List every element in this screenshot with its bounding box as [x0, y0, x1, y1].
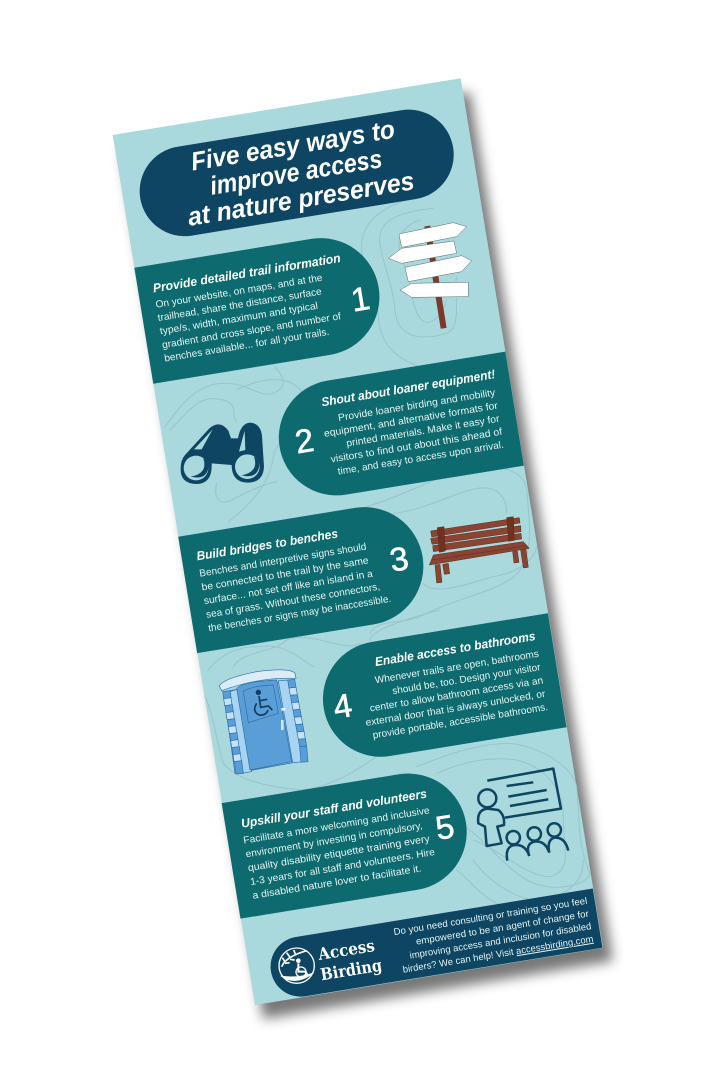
title pill: [133, 103, 460, 243]
panel 5 heading: Upskill your staff and volunteers: [240, 787, 428, 831]
panel 2 body: equipment, and alternative formats for: [323, 401, 499, 440]
panel 2 heading: Shout about loaner equipment!: [320, 367, 496, 409]
panel 2 body: printed materials. Make it easy for: [346, 414, 501, 450]
panel 4 body: center to allow bathroom access via an: [369, 675, 544, 715]
panel 4 heading: Enable access to bathrooms: [374, 629, 536, 669]
card drop shadow: [122, 92, 613, 1019]
rotated card: [113, 78, 603, 1005]
panel 3 body: the benches or signs may be inaccessible.: [208, 594, 392, 634]
panel 2 body: time, and easy to access upon arrival.: [337, 440, 505, 478]
icon: accessible portable toilet: [219, 670, 308, 774]
panel 2 body: visitors to find out about this ahead of: [330, 427, 503, 465]
number 3: 3: [387, 539, 411, 579]
logo wordmark: Birding: [319, 956, 384, 984]
title text: Five easy ways to: [189, 114, 397, 177]
footer call to action: [393, 896, 594, 976]
card background: [113, 78, 603, 1005]
panel 1 body: type/s, width, maximum and typical: [159, 301, 319, 337]
footer call to action: empowered to be an agent of change for: [415, 909, 590, 948]
panel 4 body: provide portable, accessible bathrooms.: [372, 702, 549, 741]
panel 3: bridges to benches: [178, 498, 432, 653]
panel 3 body: surface... not set off like an island in a: [203, 569, 374, 607]
icon: park bench: [429, 517, 529, 583]
footer band: [266, 889, 602, 1001]
panel 1: trail information: [134, 229, 388, 384]
panel 4 body: external door that is always unlocked, or: [365, 689, 547, 729]
title text: at nature preserves: [185, 165, 416, 232]
panel 3 body: sea of grass. Without these connectors,: [205, 582, 381, 621]
panel 1 body: On your website, on maps, and at the: [155, 273, 324, 311]
topographic contour lines: [165, 195, 590, 907]
logo emblem: [279, 948, 314, 983]
number 2: 2: [292, 421, 316, 460]
footer call to action: Do you need consulting or training so you feel: [393, 896, 588, 938]
panel 3 heading: Build bridges to benches: [195, 527, 339, 563]
icon: signpost: [388, 223, 472, 328]
number 5: 5: [433, 807, 457, 847]
rotated content group: [116, 100, 602, 1005]
panel 1 body: [155, 271, 344, 365]
panel 3 body: Benches and interpretive signs should: [199, 542, 367, 580]
footer call to action: birders? We can help! Visit accessbirding.com: [402, 934, 594, 976]
number 1: 1: [348, 279, 372, 319]
panel 4 body: Whenever trails are open, bathrooms: [374, 649, 540, 686]
panel 4: access to bathrooms: [314, 613, 567, 765]
logo wordmark: Access: [316, 936, 376, 964]
panel 1 body: gradient and cross slope, and number of: [161, 311, 342, 351]
panel 5 body: [243, 805, 440, 902]
panel 5 body: quality disability etiquette training every: [247, 834, 431, 874]
panel 5 body: Facilitate a more welcoming and inclusive: [243, 805, 431, 847]
panel 2 body: [321, 387, 506, 479]
number 4: 4: [331, 686, 355, 726]
panel 3 body: [199, 539, 392, 634]
panel 4 body: [358, 649, 549, 742]
panel 5 body: 1-3 years for all staff and volunteers. Hire: [249, 847, 436, 888]
panel 5 body: a disabled nature lover to facilitate it.: [252, 863, 422, 902]
icon: training presenter and audience: [478, 769, 568, 861]
panel 5 body: environment by investing in compulsory,: [245, 821, 423, 860]
panel 1 heading: Provide detailed trail information: [152, 251, 342, 295]
panel 3 body: be connected to the trail by the same: [201, 555, 370, 594]
icon: binoculars: [181, 423, 264, 484]
logo wordmark: [316, 935, 384, 984]
panel 2 body: Provide loaner birding and mobility: [337, 388, 496, 424]
title text: improve access: [208, 143, 384, 201]
panel 2: loaner equipment: [270, 352, 524, 504]
panel 4 body: should be, too. Design your visitor: [392, 662, 542, 697]
panel 5: upskill staff: [222, 765, 475, 919]
title text: [177, 112, 416, 232]
panel 1 body: trailhead, share the distance, surface: [157, 286, 323, 324]
footer call to action: improving access and inclusion for disabled: [409, 921, 592, 962]
panel 1 body: benches available... for all your trails.: [164, 327, 330, 365]
